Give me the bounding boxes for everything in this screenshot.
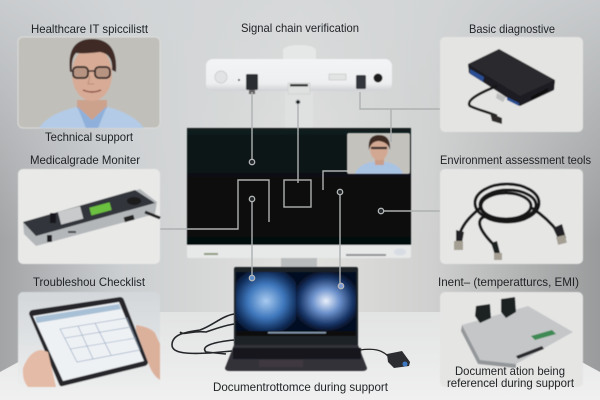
diagnostic device photo [440, 37, 583, 132]
panel: healthcare IT specialist [18, 22, 160, 144]
monitor stand and mount arm [206, 45, 392, 130]
caption: technical support: Technical support [45, 130, 134, 144]
connector line into webcam inset [390, 109, 392, 142]
caption: documentation being referenced: referencel during support [447, 376, 575, 390]
panel: troubleshooting checklist [18, 275, 160, 387]
usb dongle with cable [360, 349, 410, 368]
tablet checklist photo [18, 292, 160, 387]
monitor control unit photo [18, 169, 160, 264]
heading: environment assessment tools: Environment assessment teols [440, 153, 591, 167]
laptop [225, 267, 367, 371]
panel: medical grade monitor [18, 153, 160, 264]
instrument board photo [440, 292, 583, 387]
connector lines between monitor, mount, laptop and panels [160, 92, 440, 286]
caption: documentation being referenced [447, 364, 575, 390]
central monitor [187, 128, 411, 267]
panel: instrument temperature and EMI [438, 275, 583, 390]
connector node markers [249, 100, 384, 289]
panel: environment assessment tools [440, 153, 591, 264]
heading: healthcare IT specialist: Healthcare IT spiccilistt [31, 22, 149, 36]
coiled cable photo [440, 169, 583, 264]
heading: inent temperature EMI: Inent– (temperatturcs, EMI) [438, 275, 579, 289]
portrait photo [18, 37, 160, 128]
laptop cables [172, 314, 234, 354]
caption: documentation being referenced: Document ation being [455, 364, 565, 378]
webcam video inset [347, 133, 410, 174]
heading: basic diagnostive: Basic diagnostive [469, 22, 555, 36]
caption: documentation during support: Documentrottomce during support [213, 380, 389, 394]
heading: troubleshou checklist: Troubleshou Checklist [33, 275, 146, 289]
heading: medicalgrade moniter: Medicalgrade Moniter [30, 153, 140, 167]
panel: basic diagnostic [440, 22, 583, 132]
panel: signal chain heading: Signal chain verification [241, 21, 359, 35]
white table surface [0, 312, 600, 400]
